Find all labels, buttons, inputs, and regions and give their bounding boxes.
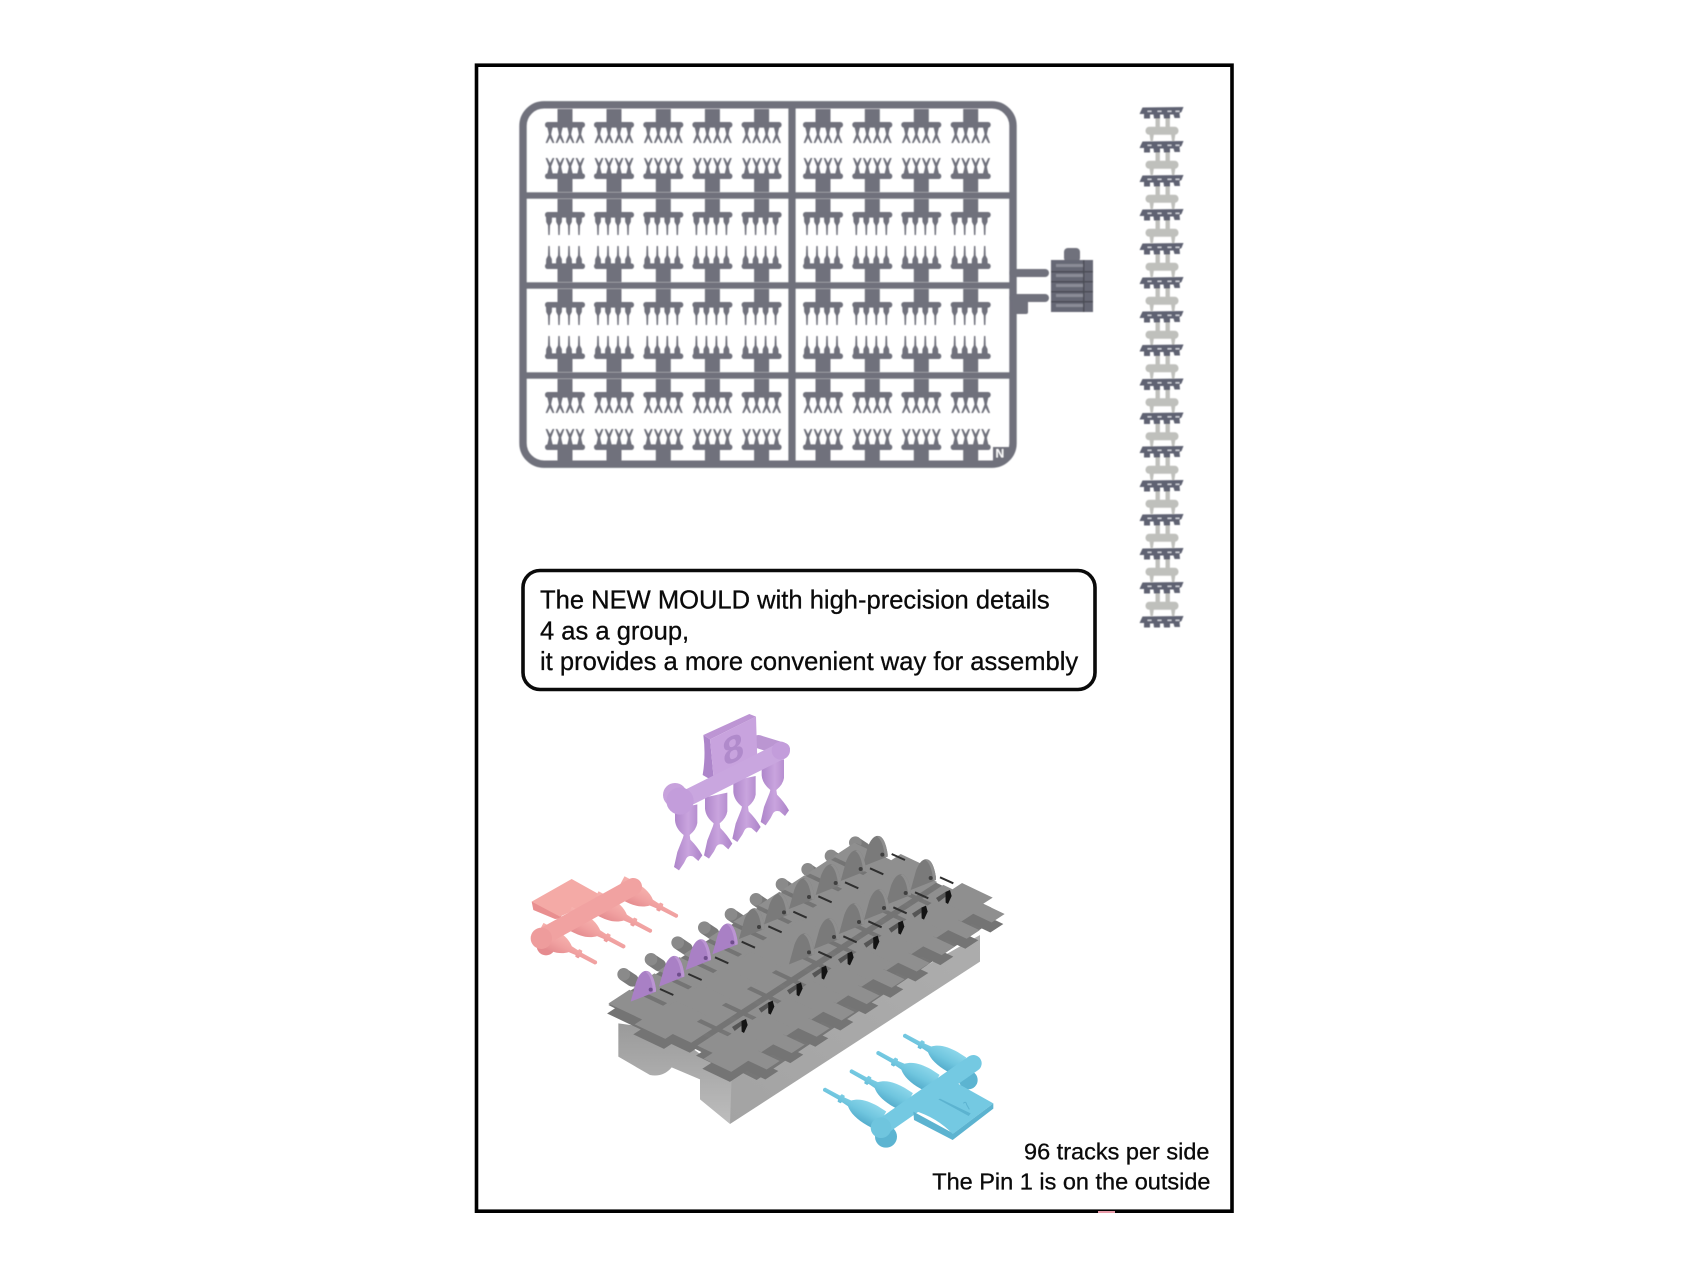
rear knobs [617,836,864,981]
backing under the links [608,843,1002,1080]
side block attached to the sprue [1010,248,1093,314]
callout box: it provides a more convenient way for assembly [540,648,1078,676]
small pink mark on the frame [1098,1211,1115,1213]
outer black frame [476,65,1232,1211]
note: tracks per side and pin position: 96 tracks per side [1024,1138,1210,1164]
track links [598,837,1014,1091]
N marker tag [993,446,1010,463]
blue pin group part [818,1025,993,1148]
number plate: 8 [721,724,746,775]
pink pin group part [531,876,683,973]
second row of guide horns [789,859,953,964]
note: tracks per side and pin position: The Pin 1 is on the outside [932,1168,1210,1194]
callout box [523,570,1095,690]
note: tracks per side and pin position [932,1138,1210,1194]
flat tab with mark [913,1081,993,1140]
callout box: 4 as a group, [540,618,689,646]
purple pin group part [663,714,790,870]
number plate [703,714,757,782]
dark holes between the links [732,890,952,1033]
base block [618,935,980,1124]
N marker tag: N [996,446,1004,460]
callout box: The NEW MOULD with high-precision details [540,586,1050,614]
first row of guide horns [739,836,905,939]
assembled track chain [1140,107,1184,628]
purple highlighted horns [631,924,755,1002]
sprue: grey parts runner with track pin groups [523,105,1013,464]
grey track block assembly [598,836,1014,1124]
